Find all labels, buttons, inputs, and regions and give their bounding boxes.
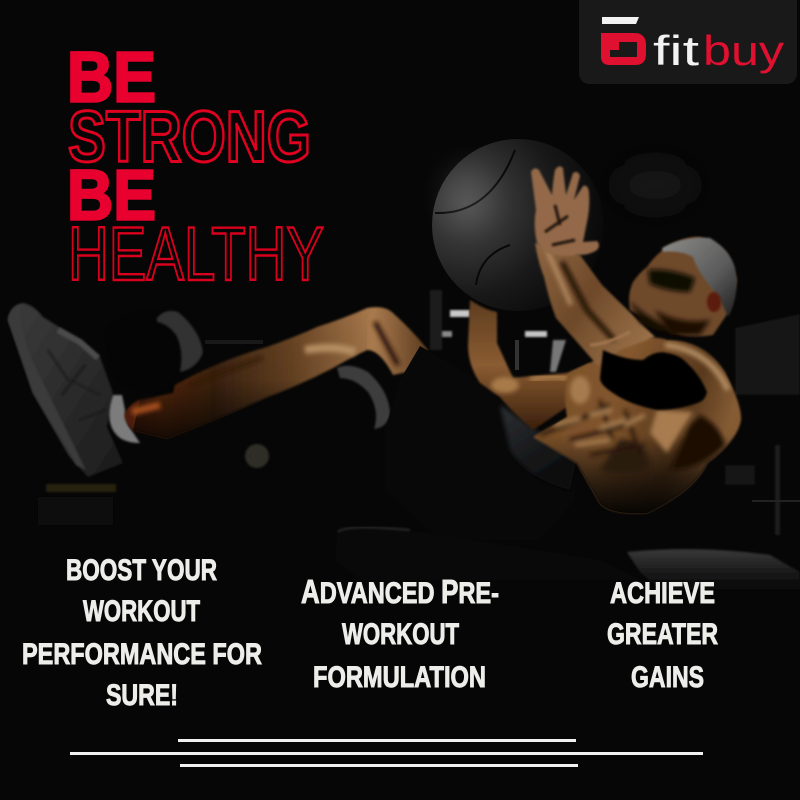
caption: achieve greater gains	[607, 577, 718, 694]
caption: achieve greater gains: GREATER	[607, 618, 718, 651]
hand	[531, 166, 599, 256]
medicine ball	[432, 139, 604, 311]
sock	[109, 395, 140, 443]
torso	[533, 338, 741, 513]
caption: boost your workout: PERFORMANCE FOR	[22, 638, 262, 671]
bench	[335, 527, 800, 590]
front arm	[535, 243, 655, 366]
title: STRONG: STRONG	[68, 98, 311, 178]
caption: achieve greater gains: ACHIEVE	[610, 577, 715, 610]
title: BE second: BE	[67, 156, 156, 236]
title: HEALTHY: HEALTHY	[68, 212, 324, 297]
gym background details	[38, 161, 800, 535]
leg	[124, 307, 428, 438]
shorts	[385, 346, 577, 540]
head	[629, 237, 737, 336]
caption: boost your workout: BOOST YOUR	[66, 554, 217, 587]
caption: advanced pre-workout: ADVANCED PRE-	[301, 573, 499, 610]
dumbbell behind foot	[105, 309, 204, 394]
caption: advanced pre-workout	[301, 573, 499, 694]
logo wordmark: fit: fit	[653, 27, 699, 74]
caption: boost your workout: SURE!	[106, 679, 178, 712]
logo wordmark: buy: buy	[703, 27, 784, 74]
back arm	[468, 300, 600, 430]
title: BE: BE	[67, 38, 156, 118]
caption: advanced pre-workout: FORMULATION	[313, 661, 486, 694]
decorative lines	[70, 739, 703, 767]
caption: achieve greater gains: GAINS	[631, 661, 704, 694]
second dumbbell	[337, 366, 390, 429]
shoe	[8, 303, 123, 477]
logo panel	[579, 0, 797, 84]
bench knob	[245, 444, 269, 468]
caption: advanced pre-workout: WORKOUT	[342, 618, 459, 651]
caption: boost your workout	[22, 554, 262, 712]
arm shadow	[600, 350, 707, 410]
logo icon	[601, 17, 646, 65]
caption: boost your workout: WORKOUT	[83, 595, 200, 628]
title	[67, 38, 324, 297]
